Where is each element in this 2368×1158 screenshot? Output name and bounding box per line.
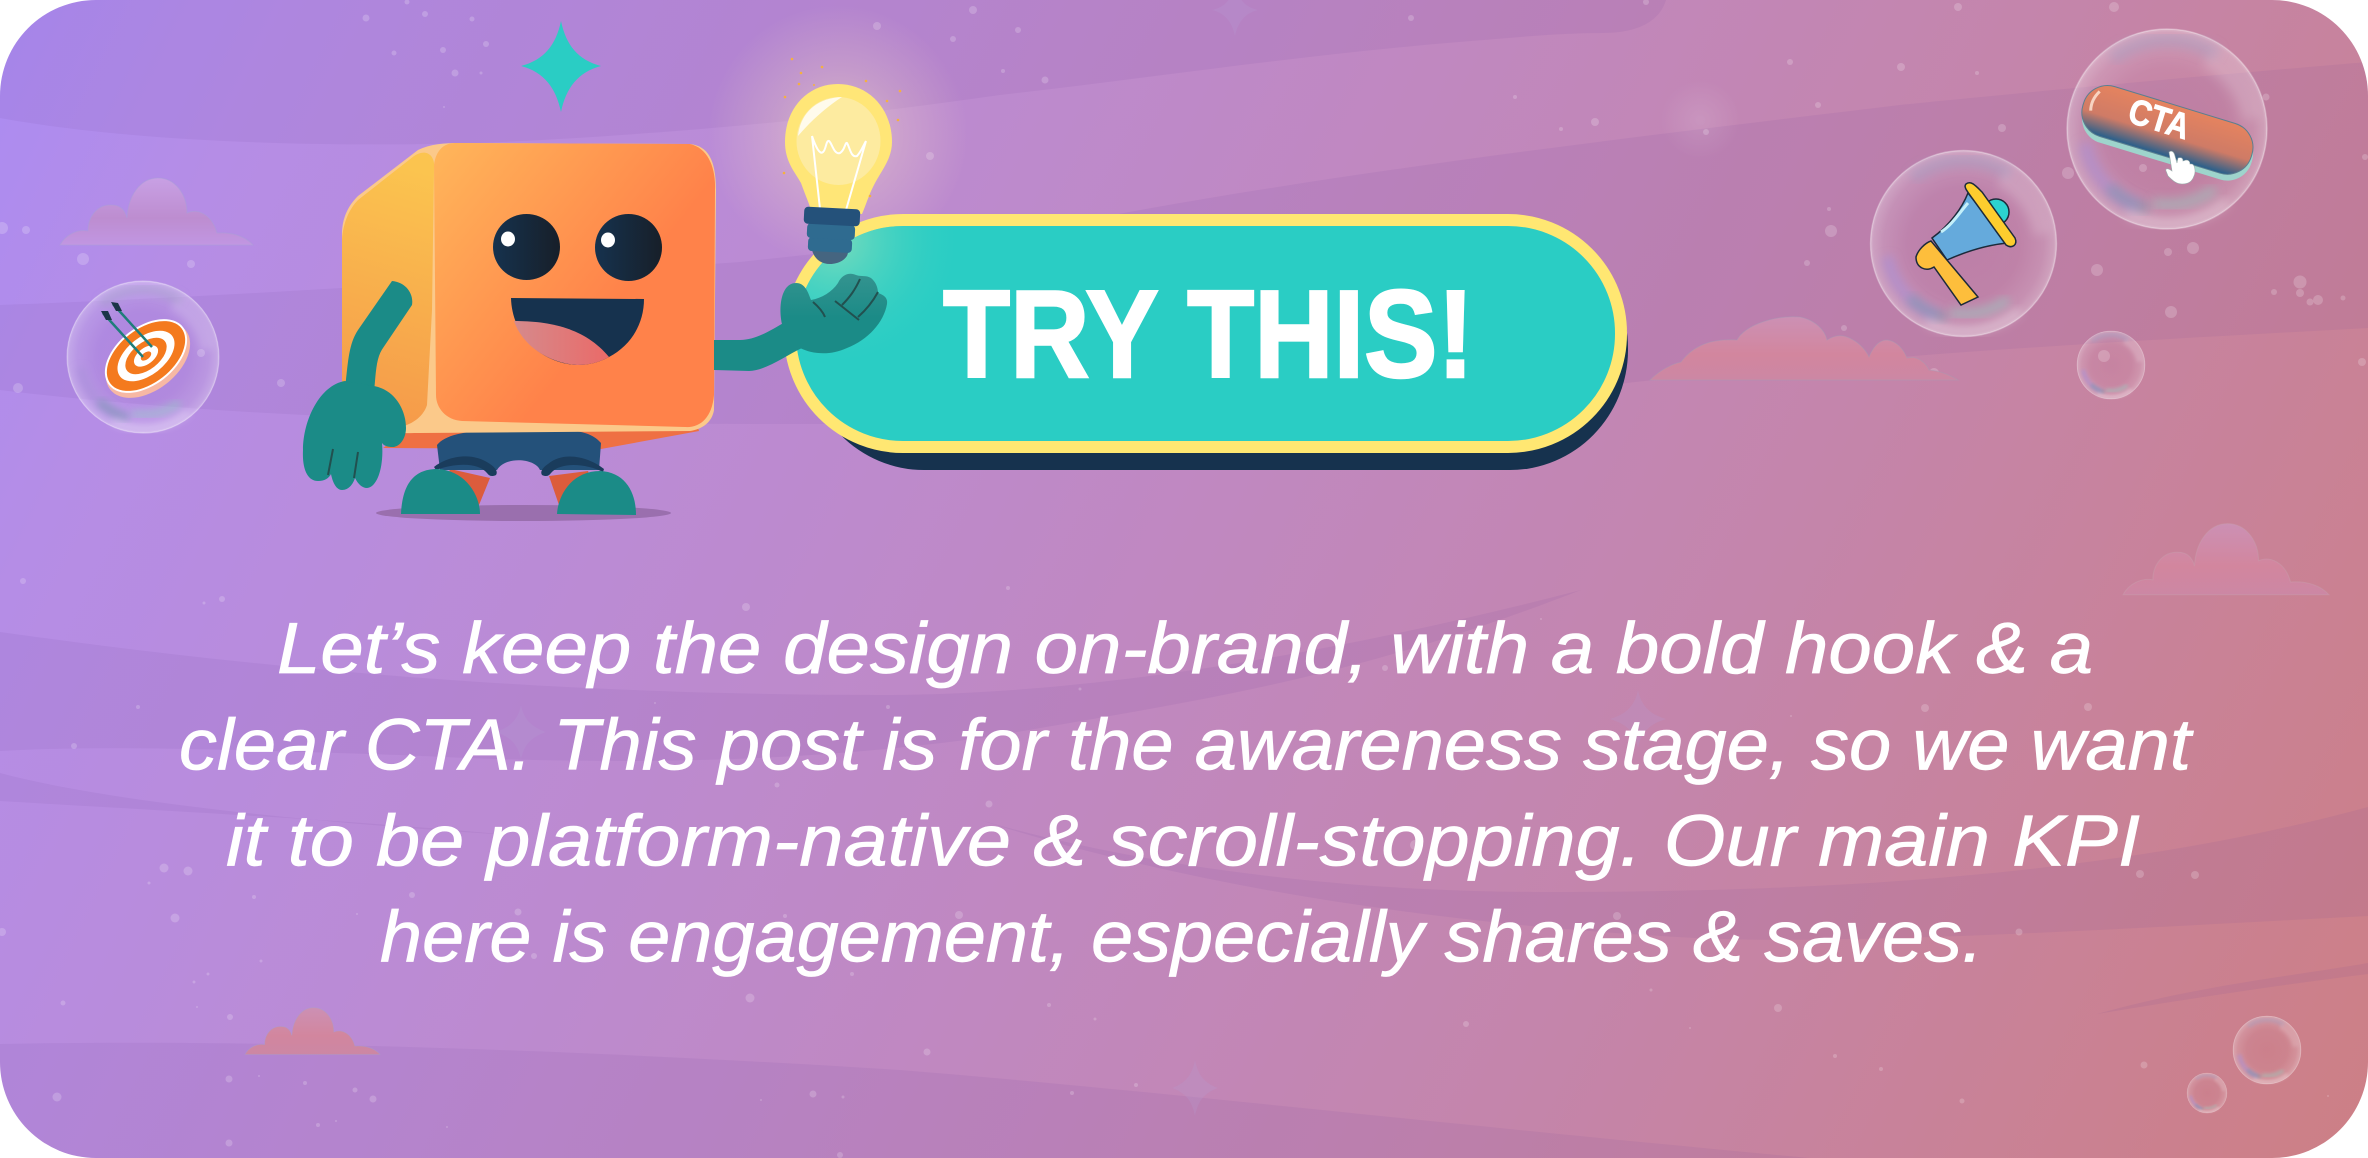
body text <box>179 609 2194 978</box>
cloud: right centre <box>1650 317 1958 380</box>
button: try this <box>790 220 1628 470</box>
body text: clear CTA. This post is for the awareness stage, so we want <box>179 706 2194 786</box>
bubble: bottom right large <box>2233 1016 2301 1084</box>
cloud: bottom left <box>245 1008 380 1054</box>
heading: try this: TRY THIS! <box>943 266 1474 404</box>
eyes <box>493 214 662 281</box>
bubble: megaphone icon <box>1870 150 2056 336</box>
character: orange box mascot <box>303 143 887 521</box>
icon: CTA pill button: CTA <box>2124 90 2195 147</box>
icon: CTA pill button <box>2074 76 2262 187</box>
cloud: top left <box>60 178 253 245</box>
right arm and hand <box>714 274 887 371</box>
left arm and hand <box>303 281 412 490</box>
icon: teal star <box>521 21 601 112</box>
icon: light bulb <box>783 58 901 264</box>
cloud: right lower <box>2123 524 2329 595</box>
bubble: bottom right small <box>2187 1073 2227 1113</box>
bubble: CTA button icon <box>2067 29 2267 229</box>
icon: hand cursor <box>2166 151 2195 184</box>
body text: here is engagement, especially shares & saves. <box>380 898 1983 978</box>
mouth <box>511 298 644 365</box>
icon: megaphone <box>1916 183 2016 305</box>
body text: it to be platform-native & scroll-stopping. Our main KPI <box>226 802 2140 882</box>
bubble: target icon <box>67 281 219 433</box>
body text: Let’s keep the design on-brand, with a bold hook & a <box>277 609 2093 689</box>
icon: target <box>91 302 204 413</box>
light bulb glow <box>708 5 968 265</box>
bubble: small right <box>2077 331 2145 399</box>
